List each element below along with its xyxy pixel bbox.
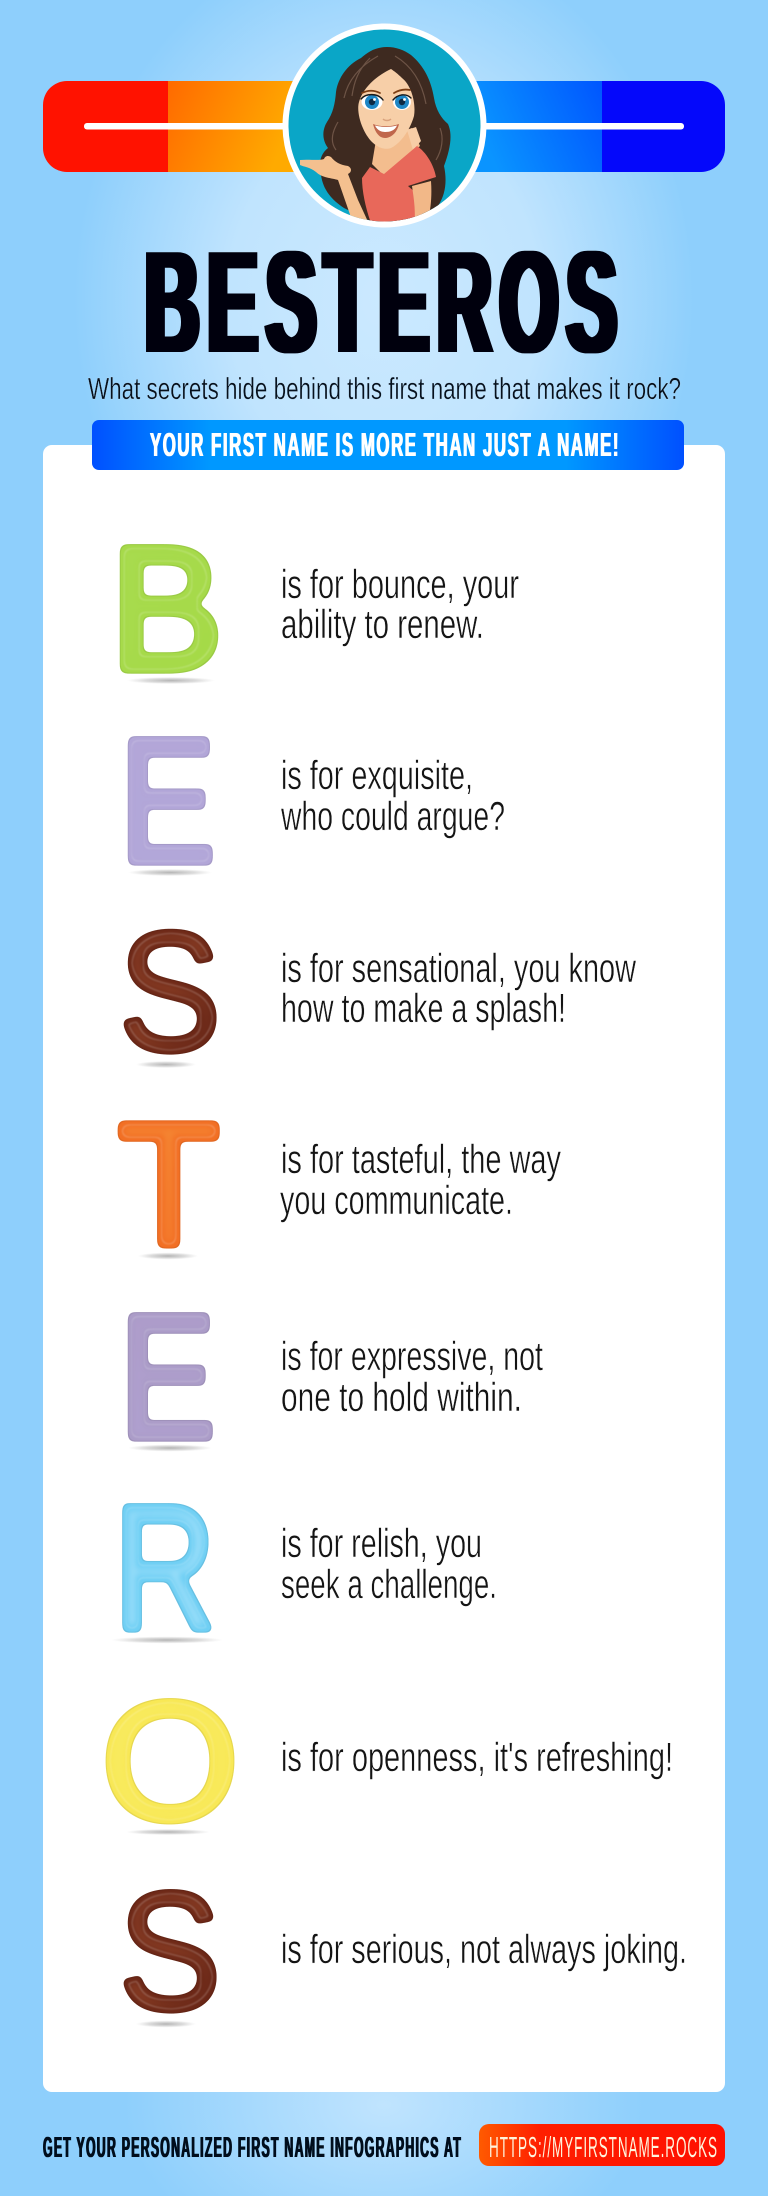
letter shadow: [111, 1636, 223, 1644]
letter E: E: [119, 1279, 216, 1476]
letter shadow: [128, 1444, 212, 1452]
description: is for relish, you: [281, 1520, 482, 1566]
face: [358, 69, 414, 149]
row: E: [119, 1279, 543, 1476]
letter E: E: [119, 703, 216, 900]
description: you communicate.: [280, 1177, 513, 1223]
letter B: B: [110, 510, 223, 707]
right arm: [412, 181, 432, 217]
description: [280, 752, 505, 839]
left arm and hand: [300, 156, 368, 220]
hair: [320, 47, 451, 222]
eyebrows and lashes: [361, 90, 411, 100]
banner: [92, 420, 684, 470]
header bar: [43, 81, 725, 172]
description: [280, 1136, 561, 1223]
letter T: T: [118, 1087, 220, 1282]
description: is for tasteful, the way: [281, 1136, 561, 1182]
letter shadow: [138, 1252, 198, 1260]
row: B: [110, 510, 519, 707]
left eye: [362, 94, 382, 110]
panel: white content card: [43, 445, 725, 2092]
footer url button: [479, 2124, 725, 2166]
description: who could argue?: [280, 793, 505, 839]
row: R: [111, 1468, 497, 1666]
description: how to make a splash!: [281, 985, 566, 1031]
letter R: R: [114, 1468, 216, 1666]
neck: [372, 128, 420, 176]
row: S: [118, 1858, 687, 2045]
icon: woman portrait: [282, 24, 486, 228]
letter shadow: [136, 1061, 196, 1068]
description: is for expressive, not: [281, 1333, 543, 1379]
description: [281, 1520, 497, 1607]
letter shadow: [128, 869, 212, 876]
letter O: O: [101, 1667, 239, 1855]
nose: [383, 119, 391, 120]
letter shadow: [126, 1829, 210, 1835]
description: is for bounce, your: [281, 561, 519, 607]
description: seek a challenge.: [281, 1561, 497, 1607]
hair highlights: [332, 56, 442, 160]
right eye: [393, 94, 411, 110]
letter shadow: [136, 2020, 196, 2028]
description: [281, 1333, 543, 1420]
description: ability to renew.: [281, 601, 484, 647]
letter shadow: [127, 677, 215, 684]
shirt: [362, 146, 436, 226]
row: T: [118, 1087, 561, 1282]
description: one to hold within.: [281, 1374, 522, 1420]
row: S: [118, 897, 636, 1087]
mouth: [373, 124, 399, 138]
description: [281, 561, 519, 647]
letter S: S: [118, 1858, 221, 2045]
row: O: [101, 1667, 673, 1855]
letter S: S: [118, 897, 221, 1087]
description: is for exquisite,: [281, 752, 473, 798]
row: E: [119, 703, 505, 900]
description: [281, 945, 636, 1031]
